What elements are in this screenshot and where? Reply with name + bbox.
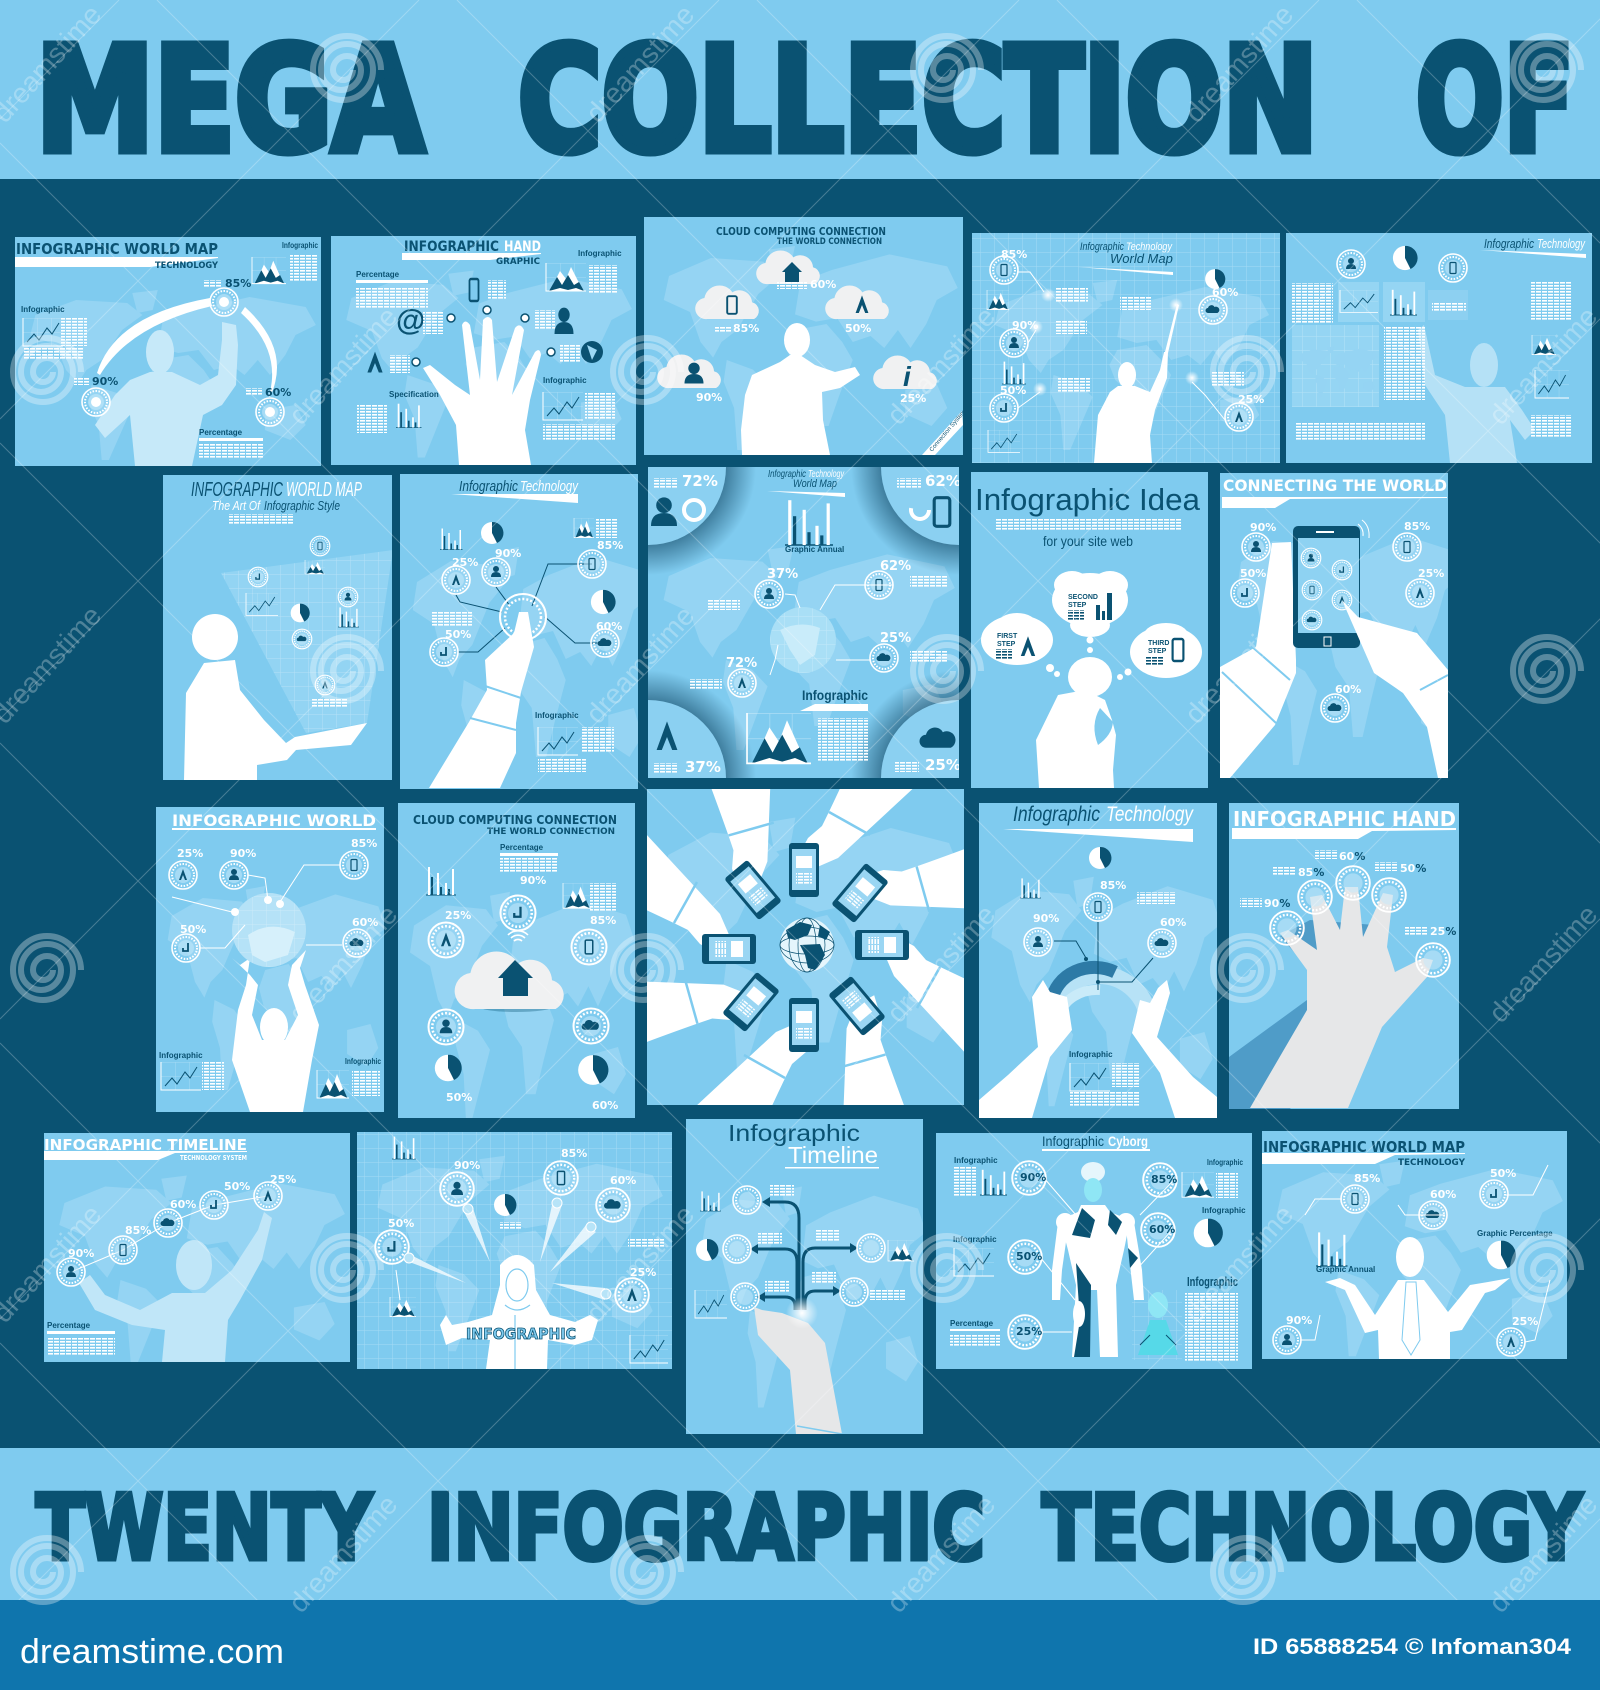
dials and percentages: 25% [1418, 567, 1444, 580]
panel title and bar chart: Technology [808, 469, 845, 480]
dials with percentages: 90% [92, 375, 118, 388]
panel: hooded man infographic [357, 1132, 672, 1369]
bottom title: TWENTY INFOGRAPHIC TECHNOLOGY: INFOGRAPHIC [427, 1476, 985, 1581]
silhouette: arm and finger [429, 612, 534, 788]
charts and labels: Percentage [199, 428, 243, 437]
smartphones [702, 843, 909, 1052]
panel title: INFOGRAPHIC TIMELINE [44, 1136, 247, 1154]
dials and stats: 90% [1033, 912, 1059, 925]
panel title and bar chart: Graphic Annual [785, 545, 844, 554]
dials and stats [375, 1147, 656, 1312]
silhouette: man holding globe [232, 950, 319, 1112]
timeline dials: 90% [68, 1247, 94, 1260]
fake text blocks, charts [987, 269, 1244, 452]
dials [428, 896, 608, 1044]
panel title: Infographic [1484, 236, 1534, 251]
panel: infographic hand graphic [331, 236, 636, 465]
dials and percentages [1231, 520, 1444, 722]
panel title: INFOGRAPHIC WORLD MAP [1263, 1138, 1465, 1156]
corner icons and stats: 37% [685, 758, 721, 776]
bottom chart and text: Infographic [802, 687, 868, 703]
bottom chart and text [747, 687, 868, 763]
charts and stats [426, 843, 618, 1112]
dials and percentages: 62% [880, 559, 911, 574]
light beams [407, 1205, 605, 1300]
panel title [1480, 236, 1586, 258]
cloud contents: STEP [1148, 648, 1167, 655]
dials, stats and charts: 90% [495, 547, 521, 560]
silhouette: left hand and arm [1220, 542, 1296, 778]
charts and labels [950, 1156, 1246, 1346]
panel: circle of hands with smartphones [647, 789, 964, 1105]
charts: Infographic [1069, 1050, 1113, 1059]
dials and stats: 60% [1160, 916, 1186, 929]
footer: dreamstime logo: dreamstime.com [20, 1633, 284, 1671]
percentages [696, 278, 926, 405]
panel title: Technology [1126, 241, 1173, 253]
panel title [413, 813, 617, 837]
panel title and bar chart [767, 469, 845, 554]
dials and stats: 85% [351, 837, 377, 850]
panel: infographic technology hands gauge [979, 803, 1217, 1118]
arrow heads [750, 1197, 858, 1302]
panel title [44, 1136, 247, 1162]
charts and labels: Infographic [953, 1235, 997, 1244]
dials and stats [169, 837, 378, 962]
panel title [1003, 803, 1194, 842]
charts [159, 1051, 381, 1098]
panel: infographic idea [971, 472, 1208, 788]
panel: infographic timeline tree [686, 1119, 923, 1434]
watermark: dreamstime text: dreamstime [282, 301, 403, 430]
charts and labels: Infographic [1202, 1206, 1246, 1215]
panel: cloud computing connection [644, 217, 967, 455]
percentages: 60% [1339, 850, 1365, 863]
dials, stats and charts [430, 518, 623, 772]
charts and stats: Percentage [500, 843, 544, 852]
charts and labels: Infographic [578, 249, 622, 258]
dials and stats: 50% [180, 923, 206, 936]
text columns and charts [1292, 246, 1572, 440]
corner icons and stats: 72% [682, 472, 718, 490]
panel title: Cyborg [1108, 1133, 1148, 1149]
dials and percentages: 85% [1404, 520, 1430, 533]
panel title [402, 239, 541, 267]
bottom title: TWENTY INFOGRAPHIC TECHNOLOGY: TWENTY [36, 1476, 373, 1581]
band: top title band [0, 0, 1600, 179]
dials and percentages: 37% [767, 567, 798, 582]
title: MEGA COLLECTION OF [36, 16, 1574, 184]
charts and labels: Infographic [1207, 1158, 1243, 1167]
panel title: Infographic [459, 478, 518, 495]
watermark: dreamstime text: dreamstime [1482, 1489, 1600, 1618]
watermark: dreamstime text: dreamstime [579, 0, 700, 128]
panel title and bar chart: World Map [793, 478, 837, 490]
watermark: dreamstime text: dreamstime [1482, 301, 1600, 430]
charts and labels: Specification [389, 390, 439, 399]
percentages: 50% [845, 322, 871, 335]
necktie outline [1402, 1282, 1420, 1355]
watermark: dreamstime text: dreamstime [880, 301, 1001, 430]
panel title: Technology [520, 478, 579, 495]
percentages: 25% [900, 392, 926, 405]
globe [780, 918, 834, 972]
watermark: dreamstime text: dreamstime [1482, 899, 1600, 1028]
panel title: HAND [504, 239, 541, 255]
dials and percentages: 25% [880, 631, 911, 646]
silhouette: man with tablet [184, 614, 367, 780]
cloud contents: STEP [1068, 602, 1087, 609]
percentages: 90% [696, 391, 722, 404]
panel title [1262, 1138, 1465, 1168]
timeline dials: 60% [170, 1198, 196, 1211]
panel title: Infographic Idea [975, 482, 1201, 517]
silhouette: pale man raising arm [79, 1212, 272, 1362]
corner icons and stats: 62% [925, 472, 961, 490]
dials and stats: 60% [610, 1174, 636, 1187]
panel title: Infographic [728, 1120, 860, 1146]
connector lines [1040, 1178, 1174, 1332]
percentages: 50% [1400, 862, 1426, 875]
dials: 85% [1151, 1173, 1177, 1186]
watermark: dreamstime text: dreamstime [1178, 600, 1299, 729]
clouds with icons [657, 250, 937, 392]
panel title: Infographic [1042, 1133, 1104, 1149]
grid world map inset [1292, 325, 1379, 407]
panel title: INFOGRAPHIC HAND [1233, 807, 1456, 831]
tree arrows [755, 1202, 852, 1310]
silhouette: man with open hands [1325, 1237, 1510, 1359]
panel title: TECHNOLOGY SYSTEM [180, 1154, 247, 1162]
panel title: Technology [1106, 803, 1194, 826]
timeline dials: 85% [125, 1224, 151, 1237]
dials: 25% [1016, 1325, 1042, 1338]
dials and stats: 90% [230, 847, 256, 860]
silhouette: two hands [979, 980, 1217, 1118]
dials and stats: 85% [1100, 879, 1126, 892]
arcs [97, 298, 277, 397]
charts [1316, 1229, 1553, 1274]
dials and percentages: 50% [1240, 567, 1266, 580]
panel title: TECHNOLOGY [1398, 1158, 1465, 1168]
cyan robot detail [1132, 1290, 1182, 1360]
panel title: for your site web [1043, 533, 1133, 549]
percentage block: Percentage [47, 1321, 91, 1330]
panel title [716, 225, 886, 247]
watermark: dreamstime text: dreamstime [880, 899, 1001, 1028]
dials and glow points: 90% [1012, 319, 1038, 332]
projected dials and charts [246, 536, 359, 708]
dials and stats [1024, 879, 1186, 990]
charts: Graphic Annual [1316, 1265, 1375, 1274]
panel title [1078, 241, 1173, 275]
dials and percentages: 72% [726, 656, 757, 671]
silhouette: man with pointer [1094, 304, 1179, 463]
percentages: 60% [810, 278, 836, 291]
panel title: CONNECTING THE WORLD [1223, 476, 1447, 495]
icons around the fingers [367, 279, 603, 373]
panel title: THE WORLD CONNECTION [777, 237, 882, 247]
globe [770, 607, 836, 673]
dials and glow points: 85% [1001, 248, 1027, 261]
word on chest: INFOGRAPHIC [466, 1325, 576, 1343]
panel title: TECHNOLOGY [155, 261, 218, 271]
dials, stats and charts: 25% [452, 556, 478, 569]
panel title: CLOUD COMPUTING CONNECTION [413, 813, 617, 827]
charts: Infographic [159, 1051, 203, 1060]
panel title: INFOGRAPHIC [191, 479, 283, 501]
percentages [1240, 850, 1456, 938]
silhouette: pale man [1418, 325, 1535, 463]
dials, stats and charts: 50% [445, 628, 471, 641]
arms [557, 695, 1057, 1195]
panel: connecting the world [1220, 473, 1448, 778]
dials, stats and charts: Infographic [535, 711, 579, 720]
cloud contents: SECOND [1068, 594, 1098, 601]
dials and glow points: 25% [1238, 393, 1264, 406]
panel: infographic with four corner circles [648, 467, 961, 778]
panel: infographic timeline [44, 1133, 350, 1362]
panel title [975, 482, 1201, 549]
dials and stats: 60% [1430, 1188, 1456, 1201]
dials and percentages: 60% [1335, 683, 1361, 696]
percentages: 25% [1430, 925, 1456, 938]
dials and percentages: 90% [1250, 521, 1276, 534]
charts [390, 1137, 668, 1363]
panel: cloud computing connection home [398, 803, 635, 1118]
silhouette: man [95, 322, 238, 466]
charts: Graphic Percentage [1477, 1229, 1553, 1238]
title: MEGA COLLECTION OF: MEGA [36, 16, 424, 184]
cloud contents [995, 593, 1183, 666]
dials [1008, 1161, 1177, 1349]
dials and stats: 60% [352, 916, 378, 929]
charts [1020, 847, 1175, 1106]
watermark: dreamstime text: dreamstime [1178, 1199, 1299, 1328]
cloud contents: FIRST [997, 633, 1018, 640]
panel title and bar chart: Infographic [768, 469, 806, 480]
charts and labels: Infographic [21, 305, 65, 314]
panel title: Infographic [1080, 241, 1124, 253]
dials and stats: 25% [177, 847, 203, 860]
panel title [451, 478, 579, 503]
panel title: GRAPHIC [496, 257, 540, 267]
charts and labels [356, 249, 622, 440]
charts and labels: Infographic [954, 1156, 998, 1165]
dials and stats: 90% [454, 1159, 480, 1172]
band: bottom title band [0, 1448, 1600, 1600]
smartphone [1293, 526, 1360, 648]
charts and stats: 60% [592, 1099, 618, 1112]
silhouette: open hand [423, 317, 541, 465]
watermark: dreamstime text: dreamstime [579, 1199, 700, 1328]
panel: infographic technology world map [972, 233, 1280, 463]
charts and labels: Percentage [356, 270, 400, 279]
panel title: The Art Of [212, 498, 261, 513]
dials: 60% [1149, 1223, 1175, 1236]
dials and stats: 85% [1354, 1172, 1380, 1185]
dials, stats and charts: 60% [596, 620, 622, 633]
panel title [1222, 476, 1447, 508]
panel title: Infographic [1013, 803, 1100, 826]
percentages: 85% [733, 322, 759, 335]
silhouette: man presenting [741, 323, 860, 455]
dials and stats [1273, 1165, 1550, 1356]
globe [231, 893, 306, 967]
charts and stats: 85% [590, 914, 616, 927]
panel: infographic hand [1229, 803, 1459, 1109]
silhouette: thinking man [1036, 657, 1116, 788]
charts and stats: 90% [520, 874, 546, 887]
cloud with house [455, 952, 564, 1012]
text block [1185, 1274, 1238, 1361]
central dial [500, 594, 546, 640]
panel title [1042, 1133, 1150, 1151]
footer: image id and author: ID 65888254 © Infoman304 [1253, 1634, 1572, 1659]
cloud contents: STEP [997, 641, 1016, 648]
dials and percentages [690, 559, 948, 697]
silhouette: right hand and finger [1342, 600, 1448, 778]
dials: 90% [1020, 1171, 1046, 1184]
panel title [728, 1120, 879, 1168]
panel title [15, 240, 218, 271]
cloud contents: THIRD [1148, 640, 1169, 647]
panel: infographic world map technology [15, 237, 321, 466]
dials with percentages: 85% [225, 277, 251, 290]
percentage block [47, 1321, 115, 1356]
connector lines [456, 564, 605, 652]
panel title: World Map [1110, 251, 1173, 266]
watermark: dreamstime text: dreamstime [880, 1489, 1001, 1618]
watermark: dreamstime text: dreamstime [579, 600, 700, 729]
dials, stats and charts: 85% [597, 539, 623, 552]
dials and glow points: 60% [1212, 286, 1238, 299]
corner circles with shadow [540, 359, 1067, 886]
dials and stats: 25% [630, 1266, 656, 1279]
gauge [1050, 967, 1148, 1015]
panel: infographic world map art of infographic style [163, 475, 392, 780]
panel: infographic technology pale man [1286, 233, 1592, 463]
panel title: Timeline [788, 1142, 878, 1168]
dials and glow points [990, 248, 1264, 431]
projection cone [221, 550, 393, 733]
charts and labels: Infographic [543, 376, 587, 385]
dials with percentages: 60% [265, 386, 291, 399]
panel title: CLOUD COMPUTING CONNECTION [716, 225, 886, 238]
silhouette: grey hand with glow [754, 1297, 842, 1434]
corner icons and stats [651, 472, 961, 776]
clouds with icons: i [903, 361, 912, 392]
watermark: dreamstime text: dreamstime [1178, 0, 1299, 128]
icons around the fingers: @ [396, 304, 425, 337]
charts and labels [21, 241, 318, 458]
panel title: INFOGRAPHIC WORLD [172, 811, 376, 830]
timeline dials [57, 1173, 296, 1286]
dials and glow points: 50% [1000, 384, 1026, 397]
panel: infographic technology finger touch [400, 474, 638, 789]
timeline dials: 50% [224, 1180, 250, 1193]
title: MEGA COLLECTION OF: COLLECTION [518, 16, 1318, 184]
dials and stats: 90% [1286, 1314, 1312, 1327]
dials: 50% [1016, 1250, 1042, 1263]
hand shadow [1229, 920, 1395, 1109]
panel: infographic world [156, 807, 384, 1112]
panel title: INFOGRAPHIC [404, 239, 499, 255]
dials and stats: 25% [1512, 1315, 1538, 1328]
panel title: INFOGRAPHIC WORLD MAP [16, 240, 218, 258]
bottom title: TWENTY INFOGRAPHIC TECHNOLOGY [36, 1476, 1583, 1581]
silhouette: grey hand [1250, 887, 1433, 1108]
panel title: THE WORLD CONNECTION [487, 827, 615, 837]
band: footer [0, 1600, 1600, 1690]
corner ribbon: Connection System [929, 410, 967, 453]
robot figure [1052, 1162, 1144, 1357]
panel: infographic cyborg [936, 1133, 1252, 1369]
hood face outline [505, 1269, 530, 1369]
dials and stats: 50% [388, 1217, 414, 1230]
panel title [191, 479, 362, 524]
charts and labels [695, 1185, 914, 1318]
dials and stats: 50% [1490, 1167, 1516, 1180]
watermark: dreamstime text: dreamstime [282, 1489, 403, 1618]
dials and stats: 85% [561, 1147, 587, 1160]
charts and stats: 50% [446, 1091, 472, 1104]
silhouette: hooded man [440, 1255, 598, 1369]
percentages: 90% [1264, 897, 1290, 910]
dials [723, 1186, 885, 1311]
thought clouds [981, 571, 1202, 680]
timeline dials: 25% [270, 1173, 296, 1186]
fingertip dials [1270, 866, 1450, 977]
panel: infographic world map man with open hands [1262, 1131, 1567, 1359]
charts and stats: 25% [445, 909, 471, 922]
panel title: Infographic Style [264, 498, 340, 513]
corner icons and stats: 25% [925, 756, 961, 774]
charts and labels: Percentage [950, 1319, 994, 1328]
watermark: dreamstime text: dreamstime [282, 899, 403, 1028]
percentages: 85% [1298, 866, 1324, 879]
dials with percentages [74, 277, 291, 426]
